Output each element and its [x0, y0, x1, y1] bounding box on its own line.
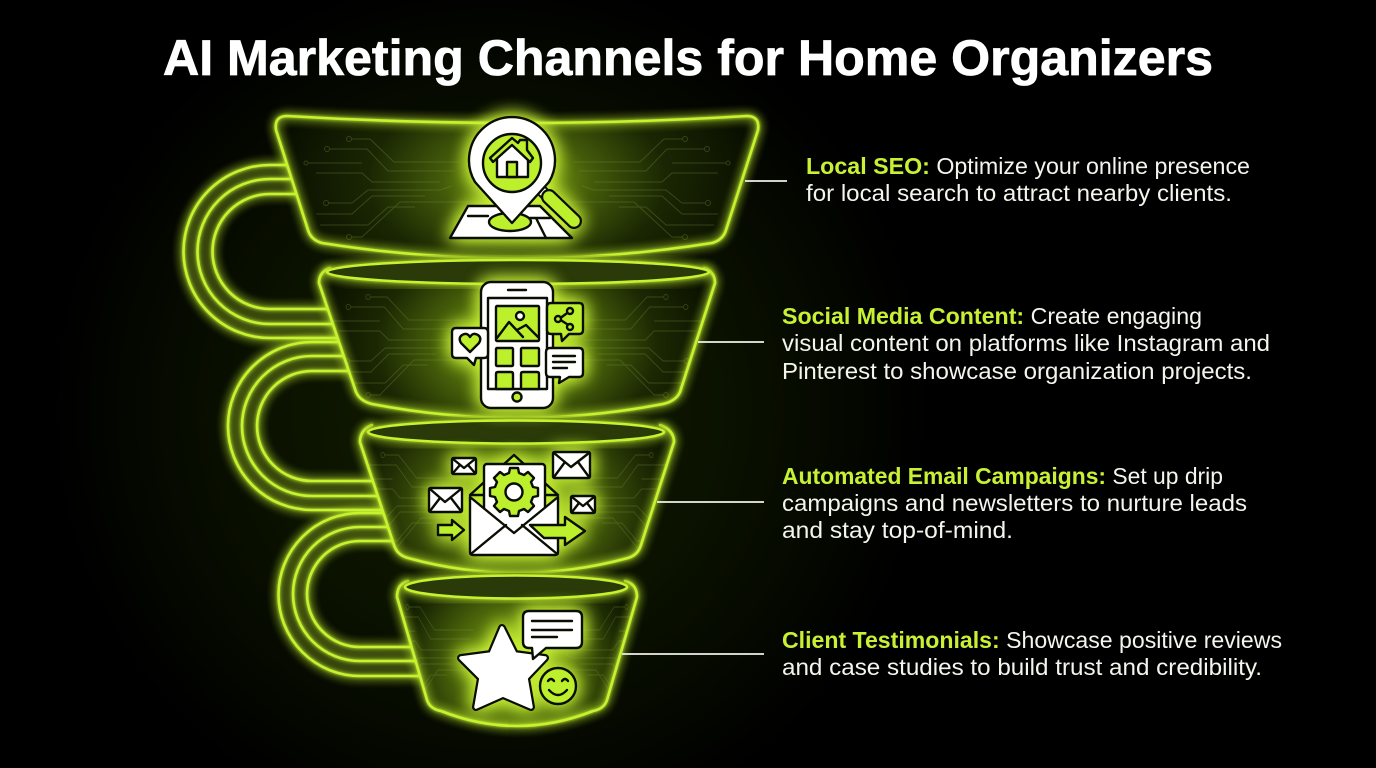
circuit pattern: [404, 604, 630, 690]
text block: Client Testimonials: Client Testimonials: Showcase positive reviews: [782, 627, 1282, 653]
text block: Automated Email Campaigns: [782, 463, 1247, 543]
icon: open envelope with gear and arrows: [429, 452, 595, 555]
text block: Client Testimonials: and case studies to build trust and credibility.: [782, 654, 1262, 680]
connector pipes: second to third segment: [228, 342, 385, 510]
text block: Local SEO: [806, 153, 1250, 206]
connector line: Social Media Content: [698, 341, 764, 343]
panel: funnel segment 1: [276, 116, 758, 258]
text block: Client Testimonials: [782, 627, 1282, 680]
panel: funnel segment 3: [349, 418, 685, 573]
title: AI Marketing Channels for Home Organizers: [163, 30, 1213, 86]
rim ellipse: [327, 260, 709, 284]
icon: star with review bubble and smiley: [461, 611, 582, 707]
text block: Social Media Content: [782, 303, 1270, 384]
circuit pattern: [328, 294, 706, 398]
segment outline: [276, 116, 758, 258]
rim ellipse: [405, 576, 627, 598]
segment outline: [397, 581, 637, 726]
rim ellipse: [368, 420, 664, 444]
connector line: Client Testimonials: [622, 653, 764, 655]
connector line: Local SEO: [745, 180, 787, 182]
text block: Social Media Content: visual content on platforms like Instagram and: [782, 330, 1270, 356]
icon: location pin with house, map and magnifier: [450, 117, 574, 238]
circuit pattern: [304, 136, 730, 240]
text block: Local SEO: for local search to attract nearby clients.: [806, 180, 1232, 206]
connector line: Automated Email Campaigns: [657, 501, 764, 503]
text block: Local SEO: Local SEO: Optimize your online presence: [806, 153, 1250, 179]
text block: Automated Email Campaigns: and stay top-of-mind.: [782, 517, 1013, 543]
text block: Automated Email Campaigns: Automated Email Campaigns: Set up drip: [782, 463, 1223, 489]
panel: funnel segment 2: [319, 259, 715, 418]
segment outline: [360, 425, 674, 573]
text block: Social Media Content: Social Media Content: Create engaging: [782, 303, 1202, 329]
segment outline: [319, 268, 715, 418]
text block: Automated Email Campaigns: campaigns and newsletters to nurture leads: [782, 490, 1247, 516]
text block: Social Media Content: Pinterest to showcase organization projects.: [782, 358, 1252, 384]
connector pipes: third to fourth segment: [278, 513, 425, 676]
circuit pattern: [369, 452, 666, 549]
connector pipes: first to second segment: [184, 165, 340, 338]
panel: funnel segment 4: [380, 573, 654, 726]
icon: smartphone with social bubbles: [452, 282, 583, 408]
